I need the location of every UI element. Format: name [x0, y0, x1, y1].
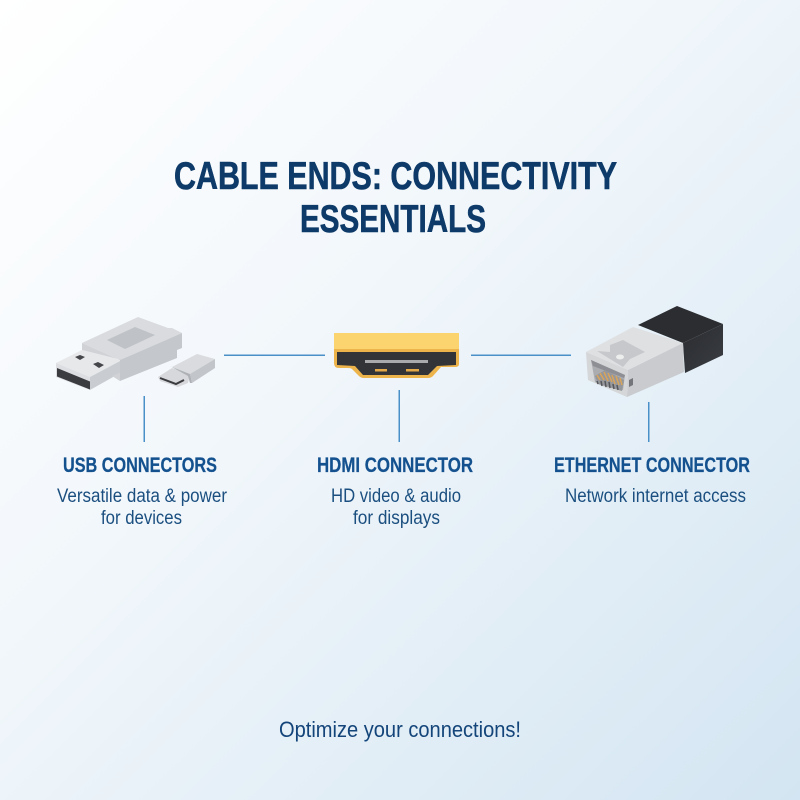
USB-A plug	[56, 317, 182, 390]
title: CABLE ENDS: CONNECTIVITY	[174, 155, 617, 198]
pointer line: Ethernet	[648, 402, 650, 442]
icon: USB connectors	[56, 317, 215, 390]
title	[174, 155, 617, 241]
connector line: HDMI to Ethernet	[471, 354, 571, 356]
icon: Ethernet connector	[586, 306, 723, 397]
text block: Ethernet connector	[554, 454, 750, 507]
text block: USB connectors: Versatile data & power	[57, 486, 228, 507]
text block: HDMI connector: HDMI CONNECTOR	[317, 454, 473, 477]
text block: USB connectors: for devices	[101, 508, 182, 529]
pointer line: HDMI	[398, 390, 400, 442]
USB-C plug	[158, 354, 215, 387]
pointer line: USB	[144, 396, 145, 442]
icon: HDMI connector	[334, 333, 459, 378]
text block: USB connectors: USB CONNECTORS	[63, 454, 217, 477]
text block: HDMI connector: HD video & audio	[331, 486, 461, 507]
title: ESSENTIALS	[300, 198, 486, 241]
connector line: USB to HDMI	[224, 354, 325, 356]
closing tagline: Optimize your connections!	[279, 717, 521, 742]
text block: HDMI connector: for displays	[353, 508, 440, 529]
text block: Ethernet connector: Network internet access	[565, 486, 746, 507]
text block: USB connectors	[57, 454, 228, 529]
text block: HDMI connector	[317, 454, 473, 529]
